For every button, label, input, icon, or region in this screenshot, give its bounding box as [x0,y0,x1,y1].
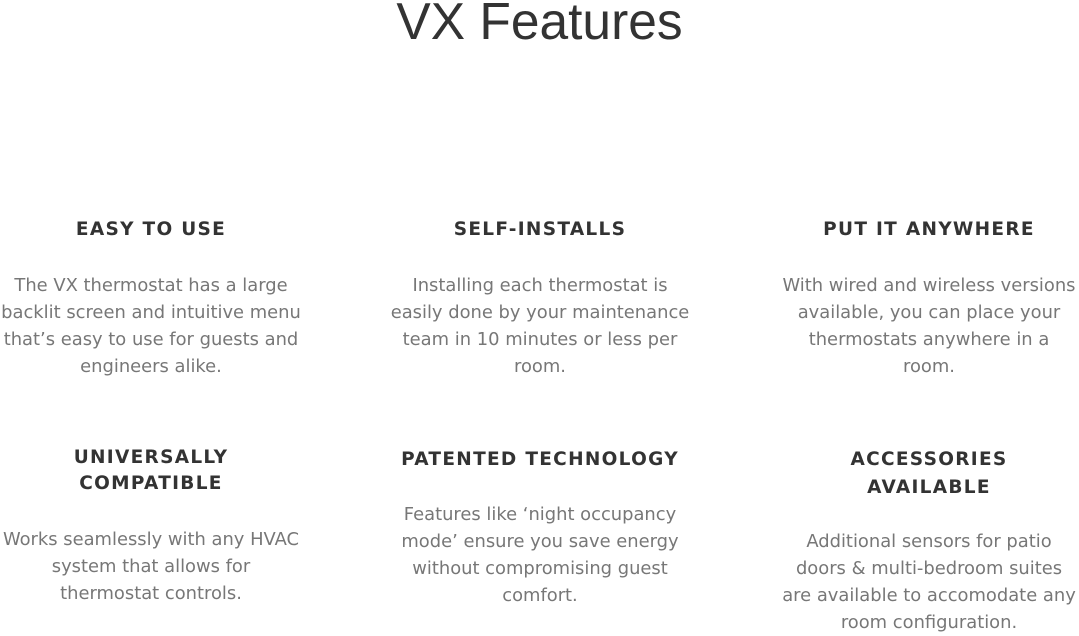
text: put it anywhere [782,275,1076,377]
text: universally compatible: Works seamlessly with any HVAC [3,529,299,550]
text: accessories available: are available to accomodate any [782,585,1076,606]
heading: patented technology: PATENTED TECHNOLOGY [401,449,679,470]
text: easy to use: backlit screen and intuitive menu [1,302,301,323]
text: patented technology: without compromising guest [412,558,668,579]
text: patented technology: mode’ ensure you save energy [401,531,679,552]
heading: self-installs: SELF-INSTALLS [454,219,626,240]
heading: accessories available: AVAILABLE [867,477,991,498]
text: universally compatible: system that allows for [52,556,250,577]
text: self-installs: Installing each thermostat is [412,275,668,296]
text: universally compatible [3,529,299,604]
text: accessories available [782,531,1076,633]
heading: accessories available: ACCESSORIES [850,449,1008,470]
text: accessories available: room configuration. [841,612,1017,633]
text: patented technology: comfort. [502,585,578,606]
heading: universally compatible: COMPATIBLE [79,473,223,494]
text: universally compatible: thermostat controls. [60,583,242,604]
heading: easy to use: EASY TO USE [76,219,226,240]
heading: universally compatible: UNIVERSALLY [74,447,228,468]
text: put it anywhere: available, you can place your [798,302,1060,323]
text: self-installs: team in 10 minutes or less per [403,329,677,350]
text: accessories available: doors & multi-bedroom suites [796,558,1062,579]
heading: put it anywhere: PUT IT ANYWHERE [823,219,1035,240]
heading: universally compatible [74,447,228,494]
text: self-installs: room. [514,356,566,377]
text: accessories available: Additional sensors for patio [806,531,1052,552]
text: self-installs: easily done by your maintenance [391,302,689,323]
text: easy to use: that’s easy to use for guests and [4,329,298,350]
text: easy to use: engineers alike. [80,356,222,377]
text: patented technology [401,504,679,606]
text: easy to use: The VX thermostat has a large [14,275,288,296]
heading: accessories available [850,449,1008,498]
text: patented technology: Features like ‘night occupancy [404,504,676,525]
text: put it anywhere: room. [903,356,955,377]
text: put it anywhere: With wired and wireless versions [782,275,1076,296]
text: self-installs [391,275,689,377]
text: easy to use [1,275,301,377]
text: put it anywhere: thermostats anywhere in a [809,329,1049,350]
